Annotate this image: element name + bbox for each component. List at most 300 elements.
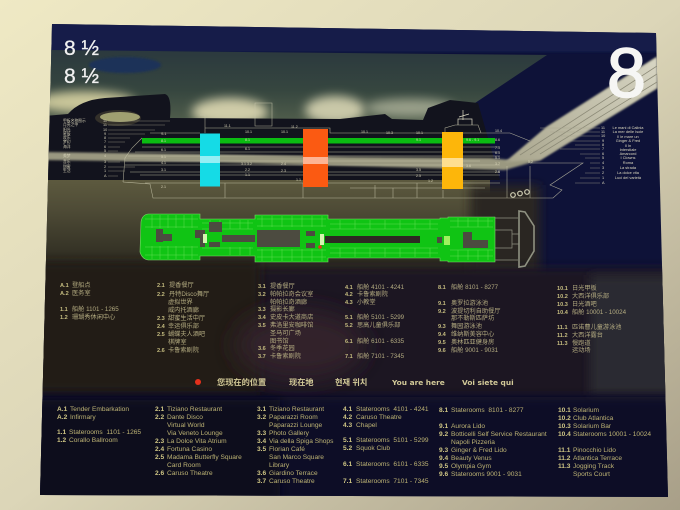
column 6 Chinese: 慢跑道 (572, 339, 591, 347)
reflection: diagonal streak (505, 57, 657, 162)
column 2 English: Caruso Theatre (167, 470, 213, 477)
deck index numbers left: 3 (104, 160, 106, 164)
deck index numbers left: 7 (104, 140, 106, 144)
deck names right (Italian): La mer delle Isole (613, 129, 643, 134)
column 5 Chinese: 舞园游泳池 (451, 322, 482, 330)
deck labels in elevation: 11.2 (291, 125, 298, 129)
deck names left (Chinese): 星辰 (63, 131, 71, 136)
large deck number 8: 8 (607, 34, 646, 112)
deck labels in elevation: 2.4 (281, 162, 286, 166)
deck number 8 1/2 top: 8 ½ (64, 37, 99, 60)
column A and 1 Chinese: 1.2 (60, 315, 68, 321)
column 3 Chinese: 3.2 (258, 292, 266, 298)
deck index numbers right: 10 (601, 134, 605, 138)
column A and 1 English: 1.1 (57, 429, 66, 436)
column 3 English: 3.6 (257, 470, 266, 477)
deck index numbers right: 5 (602, 156, 604, 160)
streak reflection on blocks (200, 156, 463, 167)
column 3 Chinese: 冬季花园 (270, 344, 295, 352)
deck index numbers left: 4 (104, 154, 106, 158)
central voids (156, 222, 488, 248)
stair and lift cores (203, 234, 450, 245)
column 2 English: 2.6 (155, 470, 164, 477)
you are here line: 현재 위치 (335, 377, 367, 387)
deck labels in elevation: 5.1 (161, 155, 166, 159)
column 6 Chinese: 匹诺曹儿童游泳池 (572, 323, 622, 331)
deck labels in elevation: 10.1 (416, 131, 423, 135)
column 2 English: Virtual World (167, 422, 205, 429)
deck labels in elevation: 2.6 (495, 170, 500, 174)
column A and 1 Chinese: A.1 (60, 283, 69, 289)
column 3 English: Tiziano Restaurant (269, 406, 324, 413)
column 2 English: Tiziano Restaurant (167, 406, 222, 413)
column 2 Chinese: 蝴蝶夫人酒吧 (168, 330, 205, 338)
deck labels in elevation: 8.1 (245, 138, 250, 142)
column A and 1 English: Tender Embarkation (70, 406, 129, 413)
column 2 Chinese: 虚拟世界 (168, 298, 193, 306)
bow outline (495, 211, 534, 267)
deck labels in elevation: 1.1 (245, 173, 250, 177)
column 2 English: 2.5 (155, 454, 164, 461)
column 2 English: 2.3 (155, 438, 164, 445)
deck labels in elevation: 2.1 (161, 185, 166, 189)
column 2 English: Via Veneto Lounge (167, 430, 223, 437)
column 3 Chinese: 提香餐厅 (270, 282, 295, 290)
you are here line: You are here (391, 378, 445, 387)
deck index numbers right: 8 (602, 143, 604, 147)
column 5 Chinese: 9.6 (438, 348, 446, 354)
column 2 English: 2.2 (155, 414, 164, 421)
column A and 1 Chinese: A.2 (60, 291, 69, 297)
column 3 English: Florian Café (269, 446, 305, 453)
column 2 Chinese: 2.2 (157, 292, 165, 298)
deck index numbers left: 5 (104, 149, 106, 153)
orange stair block (303, 129, 328, 187)
column A and 1 English (57, 406, 141, 444)
column 3 Chinese: 3.6 (258, 346, 266, 352)
deck index numbers left: 2 (104, 165, 106, 169)
column 4 English: Chapel (356, 422, 377, 429)
column 2 English: Fortuna Casino (167, 446, 212, 453)
deck names left (Chinese): 音乐 (63, 159, 71, 164)
column 6 English: 10.4 (558, 431, 571, 438)
column 3 Chinese: 摄影长廊 (270, 305, 295, 313)
column 3 English: Library (269, 462, 290, 469)
column 4 English: Caruso Theatre (356, 414, 402, 421)
column 5 Chinese: 波提切利自助餐厅 (451, 307, 500, 315)
deck index numbers left: 1 (104, 169, 106, 173)
column 2 Chinese: 2.5 (157, 332, 165, 338)
column 4 Chinese: 4.2 (345, 292, 353, 298)
you are here line: 现在地 (289, 377, 314, 387)
column 5 Chinese: 9.1 (438, 301, 446, 307)
column 3 Chinese: 帕帕拉奇酒廊 (270, 298, 307, 306)
column 5 English: 9.1 (439, 423, 448, 430)
column A and 1 Chinese (60, 281, 119, 321)
deck names left (Chinese): 甲板名称图示 (63, 118, 86, 123)
column 3 Chinese: 帕帕拉奇会议室 (270, 290, 313, 298)
column 3 Chinese: 3.4 (258, 315, 267, 321)
column 4 Chinese: 船舱 4101 - 4241 (357, 283, 405, 291)
deck labels in elevation: 10.4 (495, 129, 502, 133)
column 6 English: Pinocchio Lido (573, 447, 616, 454)
deck index numbers left: A (104, 174, 107, 178)
cyan stair block (200, 134, 220, 186)
legend: English (57, 406, 651, 485)
column 4 English (343, 406, 429, 485)
deck index numbers right: 4 (602, 161, 604, 165)
deck names right (Italian): I Clowns (621, 155, 636, 160)
column 6 English: Solarium (573, 407, 600, 414)
column 2 English: 2.4 (155, 446, 164, 453)
red dot (195, 379, 201, 385)
legend: Chinese (60, 281, 627, 360)
deck index numbers left: 11 (103, 123, 107, 127)
column 4 Chinese: 小教堂 (357, 298, 376, 306)
column A and 1 Chinese: 船舱 1101 - 1265 (72, 305, 119, 313)
reflection: light streak (45, 57, 657, 170)
ship outline (123, 103, 583, 198)
deck names left (Chinese): 甜蜜 (63, 164, 71, 169)
deck labels in elevation: 4.1 (161, 161, 166, 165)
deck names right (Italian): Luci del varietà (615, 175, 642, 180)
column 4 Chinese: 6.1 (345, 339, 353, 345)
deck names right (Italian): Ginger & Fred (616, 138, 640, 143)
deck names right (Italian): Amarcord (620, 151, 636, 156)
deck labels in elevation: 1.2 (428, 179, 433, 183)
column 4 English: 4.3 (343, 422, 352, 429)
column 3 Chinese: 弗洛里安咖啡馆 (270, 321, 313, 329)
deck names right (Italian): Le mani di Calinia (613, 125, 644, 130)
column 6 Chinese: 船舱 10001 - 10024 (572, 308, 627, 316)
deck index numbers right (601, 126, 605, 185)
column 4 Chinese: 船舱 5101 - 5299 (357, 313, 405, 321)
column 2 Chinese: 2.4 (157, 324, 166, 330)
column 2 Chinese: 幸运俱乐部 (168, 322, 199, 330)
deck index numbers right: 6 (602, 152, 604, 156)
deck names right (Italian): Interstiale (620, 147, 636, 152)
deck labels in elevation: 10.1 (245, 130, 252, 134)
deck index numbers right: 2 (602, 171, 604, 175)
deck labels in elevation: 2.3 (281, 169, 286, 173)
column 3 Chinese (258, 282, 313, 360)
column 5 Chinese: 船舱 8101 - 8277 (451, 283, 499, 291)
column 3 Chinese: 3.7 (258, 354, 266, 360)
column 6 Chinese: 日光酒吧 (572, 300, 597, 308)
column 3 English: 3.4 (257, 438, 266, 445)
deck names left (Chinese): 梦幻 (63, 139, 71, 144)
column 2 Chinese: 提香餐厅 (169, 281, 194, 289)
column 6 Chinese: 日光甲板 (572, 284, 597, 292)
column 6 Chinese: 10.3 (557, 302, 568, 308)
column 5 English: 9.3 (439, 447, 448, 454)
green deck shape (140, 214, 495, 262)
deck index numbers left (103, 119, 107, 178)
column 5 English: Aurora Lido (451, 423, 485, 430)
column 6 Chinese: 大西洋俱乐部 (572, 292, 609, 300)
column 5 English: Staterooms 8101 - 8277 (451, 407, 524, 414)
column 6 English: Club Atlantica (573, 415, 614, 422)
column 4 English: 7.1 (343, 478, 352, 485)
deck names right (Italian): La strada (620, 165, 637, 170)
deck names left (Chinese) (63, 118, 86, 173)
deck labels in elevation: 2.2 (245, 168, 250, 172)
column 6 English: Solarium Bar (573, 423, 612, 430)
deck labels in elevation: 11.1 (224, 124, 231, 128)
column 4 English: 5.1 (343, 437, 352, 444)
column 6 English: 10.3 (558, 423, 571, 430)
column 5 Chinese (438, 283, 500, 354)
column 5 English: 9.5 (439, 463, 448, 470)
column 6 Chinese: 11.2 (557, 333, 568, 339)
column 5 Chinese: 9.3 (438, 324, 446, 330)
column 2 English: Madama Butterfly Square (167, 454, 242, 461)
column 5 English: 9.4 (439, 455, 448, 462)
column 5 Chinese: 8.1 (438, 285, 446, 291)
propeller circles (511, 190, 529, 197)
deck labels in elevation: 7.1 (495, 146, 500, 150)
column 2 Chinese: 2.3 (157, 316, 165, 322)
column 5 Chinese: 船舱 9001 - 9031 (451, 346, 499, 354)
deck index numbers right: 3 (602, 166, 604, 170)
deck leader lines right (540, 128, 600, 183)
column 3 English: 3.1 (257, 406, 266, 413)
deck index numbers right: 7 (602, 147, 604, 151)
column 3 English: 3.7 (257, 478, 266, 485)
column 3 Chinese: 3.1 (258, 284, 266, 290)
yellow stair block (442, 132, 463, 189)
column 3 English: Giardino Terrace (269, 470, 318, 477)
deck labels in elevation: 6.1 (245, 147, 250, 151)
column 5 English (439, 407, 547, 478)
deck labels in elevation: 8.6 (495, 138, 500, 142)
deck names right (Italian): Il In (625, 143, 631, 148)
column 5 English: Staterooms 9001 - 9031 (451, 471, 522, 478)
column 6 Chinese (557, 284, 627, 354)
column 3 English (257, 406, 334, 485)
deck 8 green bar (142, 138, 495, 144)
column 4 English: Staterooms 4101 - 4241 (356, 406, 429, 413)
column 5 English: Beauty Venus (451, 455, 492, 462)
column 4 English: Staterooms 5101 - 5299 (356, 437, 429, 444)
column 6 English: 10.2 (558, 415, 571, 422)
column 3 English: Paparazzi Lounge (269, 422, 322, 429)
column 4 Chinese: 5.1 (345, 315, 353, 321)
column 6 Chinese: 10.4 (557, 310, 569, 316)
column 6 Chinese: 10.2 (557, 294, 568, 300)
deck labels in elevation: 6.1 (161, 148, 166, 152)
deck names right (Italian): Il le mare un (617, 134, 639, 139)
column 2 Chinese: 丹特Disco舞厅 (169, 290, 209, 298)
column 4 English: 5.2 (343, 445, 352, 452)
deck labels in elevation: 10.1 (361, 130, 368, 134)
column A and 1 English: Infirmary (70, 414, 96, 421)
deck index numbers left: 11 (103, 119, 107, 123)
column 6 English: 11.1 (558, 447, 571, 454)
column 4 Chinese: 船舱 7101 - 7345 (357, 352, 405, 360)
column 6 Chinese: 大西洋露台 (572, 331, 603, 339)
column 6 English (558, 407, 651, 478)
you are here line: 您现在的位置 (217, 377, 266, 387)
column 4 Chinese: 5.2 (345, 323, 353, 329)
deck labels in elevation: 5.1 (495, 156, 500, 160)
deck labels in elevation: 5.2 (528, 160, 533, 164)
column 5 English: 9.6 (439, 471, 448, 478)
deck labels in elevation: 6.1 (495, 151, 500, 155)
deck names left (Chinese): 美梦 (63, 153, 71, 158)
column 4 Chinese: 卡鲁索剧院 (357, 290, 388, 298)
deck index numbers right: A (602, 181, 605, 185)
column 3 English: 3.2 (257, 414, 266, 421)
column 6 English: 10.1 (558, 407, 571, 414)
column 2 English (155, 406, 242, 477)
column 2 Chinese: 卡鲁索剧院 (168, 346, 199, 354)
column 5 Chinese: 那不勒斯匹萨坊 (451, 314, 494, 322)
deck plan (140, 211, 534, 267)
column 2 English: Dante Disco (167, 414, 203, 421)
column 5 Chinese: 奥林匹亚健身房 (451, 338, 494, 346)
deck names right (Italian): La dolce vita (617, 170, 640, 175)
column A and 1 English: A.1 (57, 406, 68, 413)
column 5 English: 8.1 (439, 407, 448, 414)
column 4 English: 6.1 (343, 461, 352, 468)
column 3 English: 3.3 (257, 430, 266, 437)
deck index numbers left: 8 (104, 136, 106, 140)
column 5 English: Ginger & Fred Lido (451, 447, 507, 454)
deck names right (Italian) (613, 125, 644, 180)
column 6 English: Jogging Track (573, 463, 615, 470)
deck labels in elevation: 8.1 (161, 139, 166, 143)
column 4 Chinese: 4.3 (345, 300, 353, 306)
column 3 Chinese: 3.3 (258, 307, 266, 313)
deck index numbers left: 6 (104, 145, 106, 149)
column 6 Chinese: 运动场 (572, 346, 591, 354)
deck labels in elevation: 3.6 (466, 164, 471, 168)
column 4 English: 4.2 (343, 414, 352, 421)
deck index numbers right: 11 (601, 130, 605, 134)
column A and 1 Chinese: 医务室 (72, 289, 91, 297)
deck index numbers right: 11 (601, 126, 605, 130)
column A and 1 English: Corallo Ballroom (69, 437, 118, 444)
deck names right (Italian): Roma (623, 160, 634, 165)
column 6 English: Atlantica Terrace (573, 455, 622, 462)
column 6 Chinese: 11.3 (557, 341, 568, 347)
deck index numbers right: 9 (602, 139, 604, 143)
deck labels in elevation: 9.1 (416, 138, 421, 142)
you are here line (195, 377, 514, 387)
column 2 English: Card Room (167, 462, 201, 469)
reflection: black silhouette (45, 94, 500, 180)
deck labels in elevation: 10.3 (386, 131, 393, 135)
column 2 English: La Dolce Vita Atrium (167, 438, 227, 445)
deck labels in elevation: 3.1 3.2 (241, 162, 252, 166)
deck labels in elevation: 10.1 (281, 130, 288, 134)
column 3 English: 3.5 (257, 446, 266, 453)
column 4 English: Staterooms 7101 - 7345 (356, 478, 429, 485)
deck leader lines left (108, 121, 170, 176)
column 2 English: 2.1 (155, 406, 164, 413)
deck labels in elevation: 1.1 (296, 178, 301, 182)
deck labels in elevation: S.1 (161, 132, 166, 136)
column 3 English: Photo Gallery (269, 430, 310, 437)
column A and 1 Chinese: 登船点 (72, 281, 91, 289)
column 6 English: 11.2 (558, 455, 571, 462)
reflection: cloudy upper area (49, 50, 547, 130)
column 4 English: 4.1 (343, 406, 352, 413)
deck names left (Chinese): 欢乐 (63, 135, 71, 140)
deck names left (Chinese): 月亮之甲 (63, 122, 78, 127)
column A and 1 English: A.2 (57, 414, 68, 421)
column 5 English: Napoli Pizzeria (451, 439, 495, 446)
funnel and mast (458, 110, 472, 125)
column 5 Chinese: 维纳斯美容中心 (451, 330, 494, 338)
column 4 Chinese (345, 283, 405, 360)
column 3 English: Caruso Theatre (269, 478, 315, 485)
column 6 Chinese: 11.1 (557, 325, 568, 331)
column 2 Chinese: 甜蜜生活中厅 (168, 314, 205, 322)
column 3 English: Paparazzi Room (269, 414, 318, 421)
column A and 1 English: Staterooms 1101 - 1265 (69, 429, 141, 436)
column 5 Chinese: 9.5 (438, 340, 446, 346)
deck names left (Chinese): 阳光 (63, 127, 71, 132)
column 3 Chinese: 3.5 (258, 323, 266, 329)
deck labels in elevation (161, 124, 533, 189)
column A and 1 English: 1.2 (57, 437, 66, 444)
column 2 Chinese: 棋牌室 (168, 338, 187, 346)
column 3 Chinese: 卡鲁索剧院 (270, 352, 301, 360)
column 4 English: Staterooms 6101 - 6335 (356, 461, 429, 468)
deck number 8 1/2 bottom: 8 ½ (64, 65, 99, 88)
column 5 Chinese: 9.4 (438, 332, 447, 338)
column 3 Chinese: 史皮卡大道商店 (270, 313, 313, 321)
column 3 Chinese: 图书馆 (270, 337, 289, 345)
deck labels in elevation: 3.5 (416, 168, 421, 172)
deck labels in elevation: 2.5 (416, 174, 421, 178)
column 4 Chinese: 7.1 (345, 354, 353, 360)
column 2 Chinese (157, 281, 209, 354)
cabin grid (145, 215, 493, 261)
column 5 English: 9.2 (439, 431, 448, 438)
deck labels in elevation: 3.1 (161, 168, 166, 172)
deck names left (Chinese): 海洋 (63, 144, 71, 149)
column 4 Chinese: 思高儿童俱乐部 (357, 321, 400, 329)
ship side elevation (123, 103, 583, 198)
you-are-here marker (318, 245, 322, 249)
column 5 Chinese: 奥罗拉游泳池 (451, 299, 488, 307)
column 3 Chinese: 圣马可广场 (270, 329, 301, 337)
deck index numbers right: 1 (602, 176, 604, 180)
column 6 English: 11.3 (558, 463, 571, 470)
column 3 English: Via della Spiga Shops (269, 438, 334, 445)
deck labels in elevation: 9.6 - 9.1 (466, 138, 479, 142)
column A and 1 Chinese: 1.1 (60, 307, 68, 313)
column 2 Chinese: 威内托酒廊 (168, 306, 199, 314)
reflection: lamp ellipse (95, 110, 141, 126)
column 6 English: Sports Court (573, 471, 610, 478)
column 4 Chinese: 船舱 6101 - 6335 (357, 337, 405, 345)
deck index numbers left: 10 (103, 128, 107, 132)
column 4 Chinese: 4.1 (345, 285, 353, 291)
column 5 English: Botticelli Self Service Restaurant (451, 431, 547, 438)
column 4 English: Squok Club (356, 445, 390, 452)
deck labels in elevation: 3.7 (495, 162, 500, 166)
column A and 1 Chinese: 珊瑚秀休闲中心 (72, 313, 115, 321)
column 2 Chinese: 2.1 (157, 283, 165, 289)
deck index numbers left: 9 (104, 132, 106, 136)
column 5 Chinese: 9.2 (438, 309, 446, 315)
column 3 English: San Marco Square (269, 454, 324, 461)
you are here line: Voi siete qui (462, 378, 514, 387)
